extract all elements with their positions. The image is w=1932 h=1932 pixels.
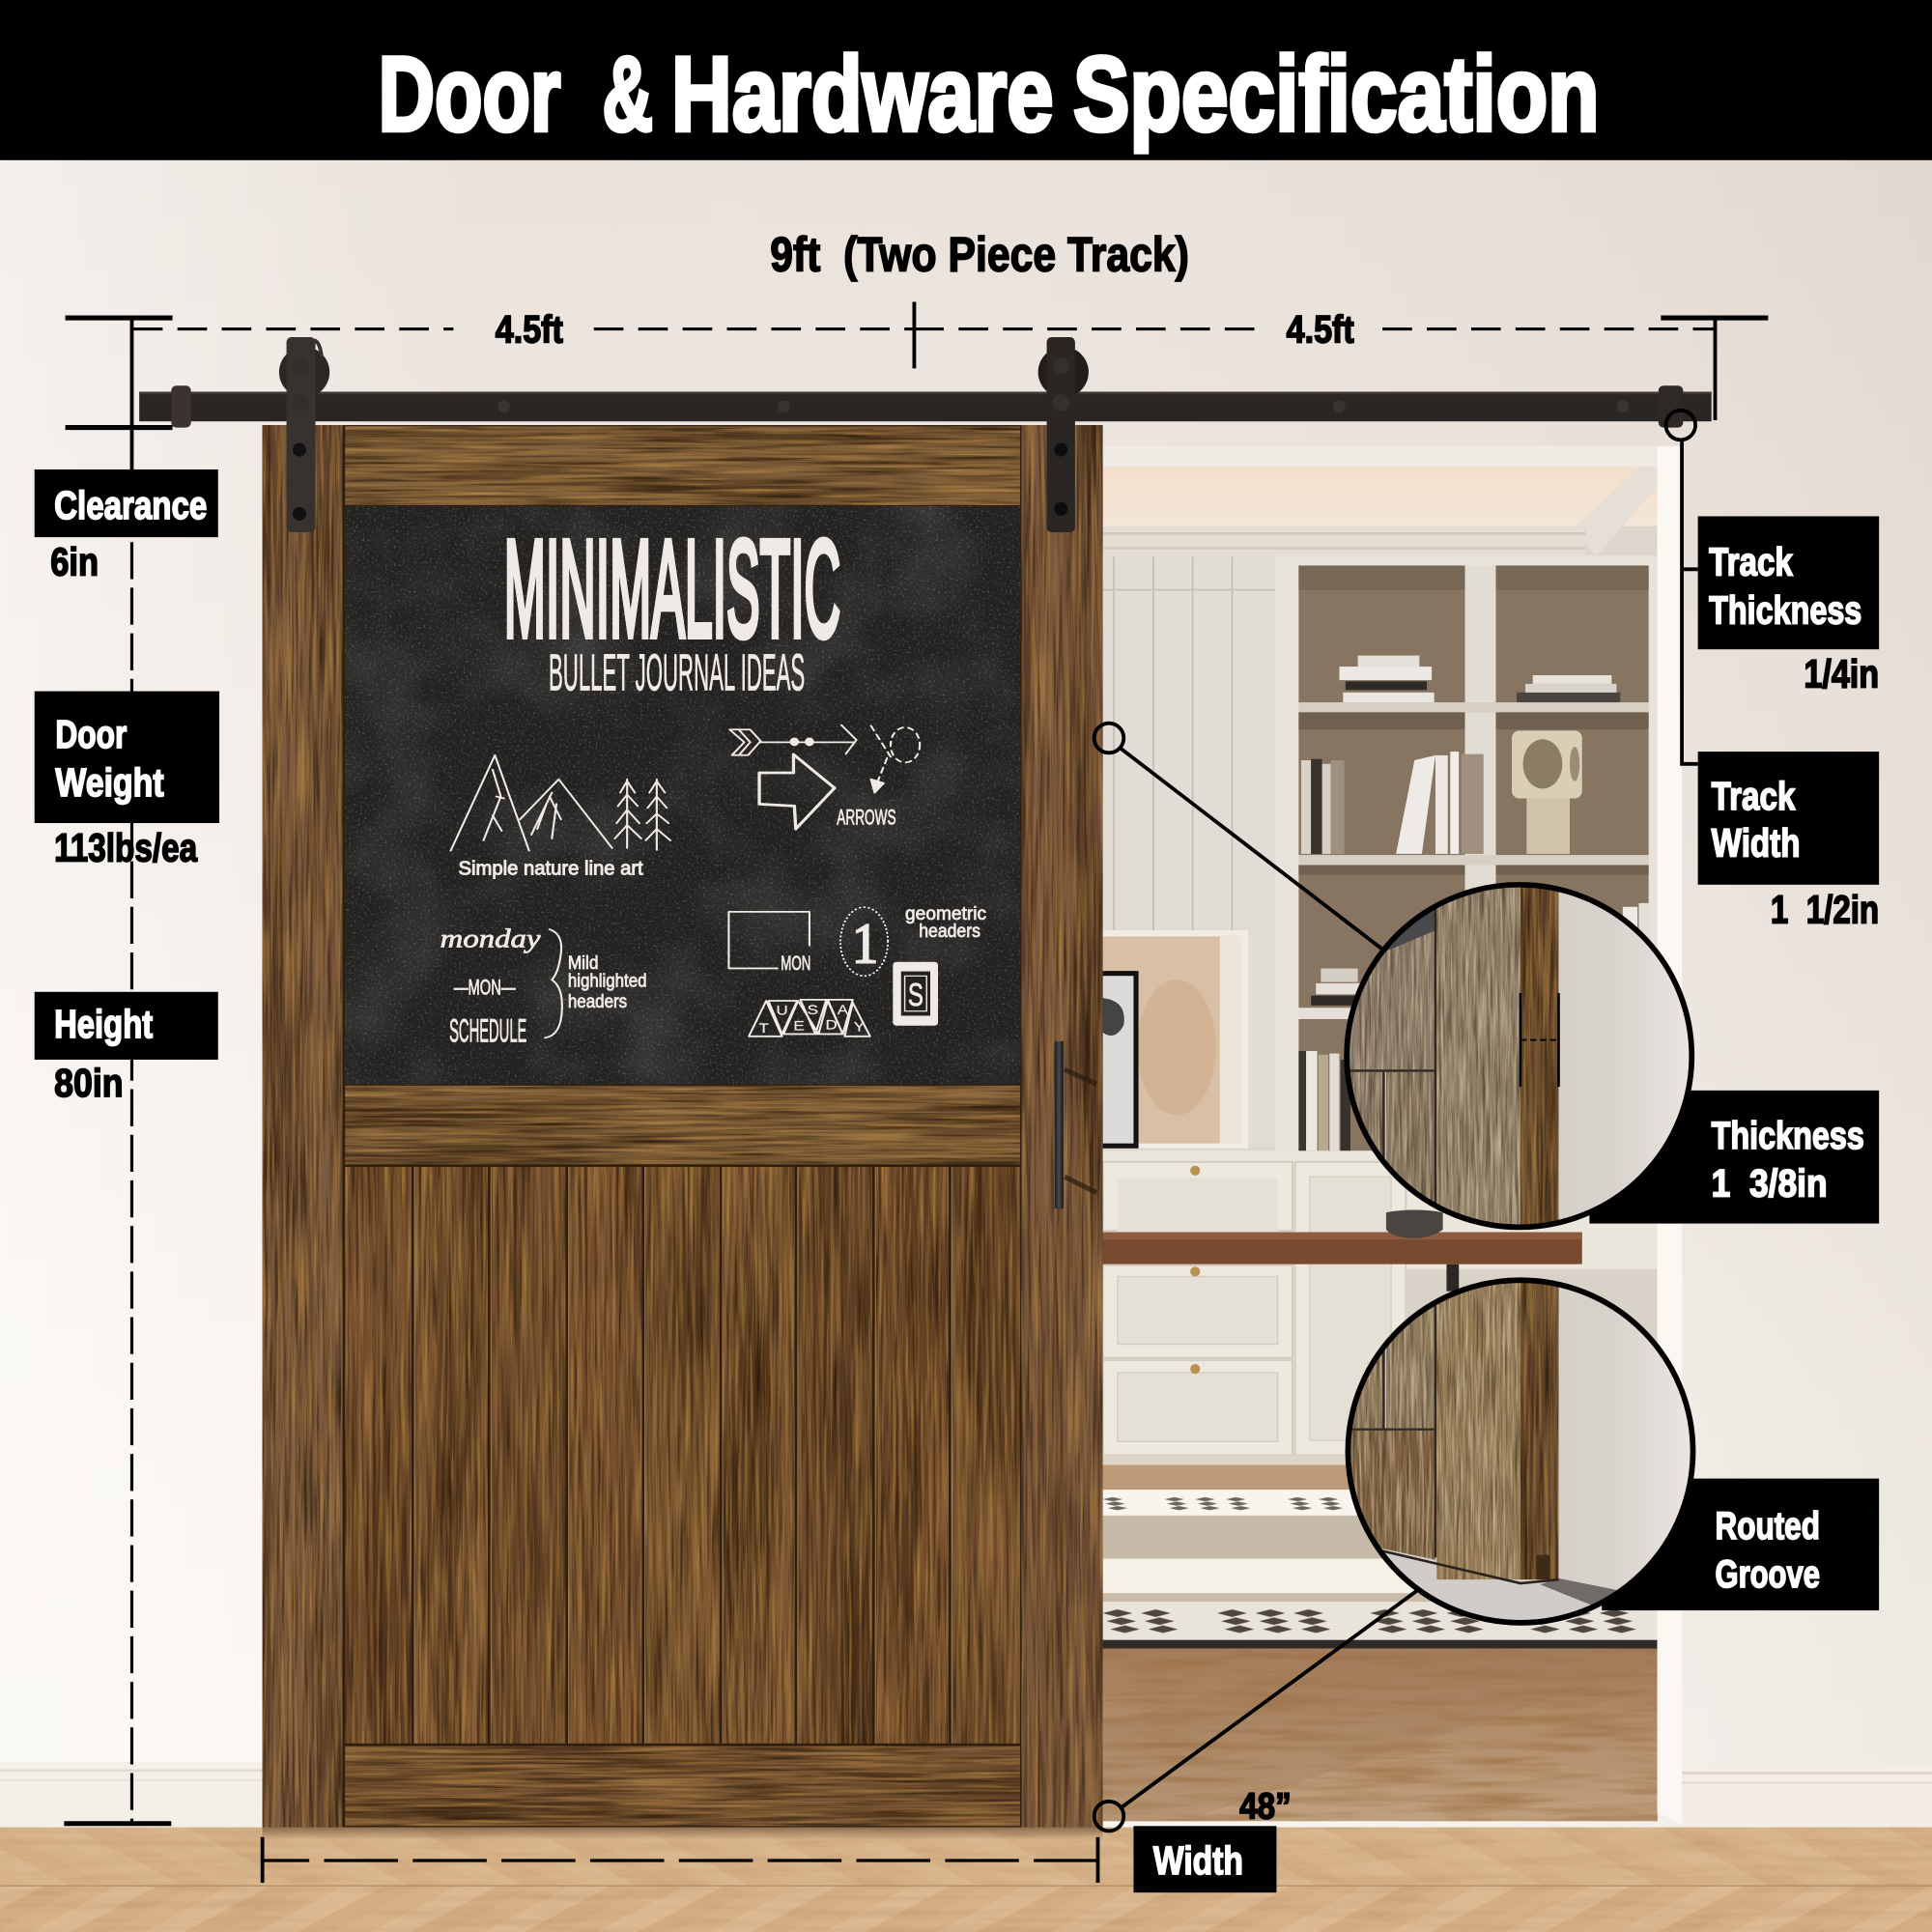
- ceiling soffit and cove light: [1103, 446, 1658, 557]
- width callout: [1133, 1786, 1292, 1892]
- routed groove callout: [1602, 1479, 1879, 1610]
- height dimension line: [64, 318, 171, 1824]
- title band: Door: [379, 36, 560, 154]
- clearance callout: 6in: [50, 540, 99, 584]
- geometric headers: S: [908, 977, 923, 1012]
- geometric headers: A: [838, 1003, 849, 1018]
- title band: Specification: [1050, 36, 1600, 154]
- track length dimension lines: [66, 301, 1768, 428]
- track thickness callout: Thickness: [1709, 587, 1861, 632]
- top rail: [345, 426, 1020, 505]
- geometric headers: E: [793, 1019, 805, 1034]
- zoom lens: routed groove: [1343, 1275, 1700, 1633]
- icon: feather arrow: [729, 725, 857, 755]
- chalkboard panel: [345, 506, 1020, 1084]
- title band: [0, 0, 1932, 160]
- framed artwork: [1103, 930, 1248, 1149]
- clearance callout: [35, 469, 218, 584]
- track length label: 9ft (Two Piece Track): [770, 228, 1189, 282]
- geometric headers: T: [759, 1021, 769, 1036]
- chalk headers: [440, 923, 646, 1049]
- half track label right: 4.5ft: [1287, 309, 1354, 352]
- track width callout: Width: [1712, 820, 1801, 865]
- books and sculpture: [1298, 656, 1651, 1151]
- track connector lines: [1665, 411, 1698, 764]
- opening jamb: [1658, 446, 1682, 1826]
- bookcase: [1275, 555, 1658, 1159]
- chalk drawing: [440, 512, 986, 1049]
- bottom rail: [345, 1746, 1020, 1826]
- track thickness callout: Track: [1709, 540, 1793, 584]
- track stop left: [171, 385, 191, 428]
- cabinets: [1103, 1151, 1658, 1466]
- icon: pine trees: [614, 780, 670, 850]
- leader lines: [1094, 724, 1417, 1831]
- chalk headers: headers: [568, 992, 627, 1012]
- half track label left: 4.5ft: [496, 309, 563, 352]
- geometric headers: U: [776, 1004, 788, 1018]
- chalk headers: Mild: [568, 953, 598, 974]
- door weight callout: [35, 692, 219, 870]
- desk with bowl: [1103, 1210, 1582, 1292]
- door handle: [1055, 1041, 1096, 1208]
- left roller hanger: [279, 337, 329, 532]
- height callout: 80in: [54, 1061, 124, 1105]
- left stile: [263, 425, 343, 1828]
- geometric headers: headers: [919, 920, 980, 942]
- chalk drawing: Simple nature line art: [459, 857, 643, 879]
- middle rail: [345, 1086, 1020, 1164]
- geometric headers: Y: [854, 1020, 866, 1035]
- geometric headers: geometric: [905, 902, 986, 924]
- barn door: [263, 425, 1103, 1828]
- track stop right: [1659, 385, 1683, 428]
- height callout: [35, 992, 218, 1105]
- track width callout: 1 1/2in: [1771, 887, 1879, 931]
- icon: dashed arrow: [871, 725, 920, 793]
- geometric headers: 1: [852, 913, 878, 976]
- chalk headers: SCHEDULE: [449, 1011, 526, 1049]
- geometric headers: D: [825, 1018, 838, 1033]
- interior floor and rug: [1103, 1465, 1658, 1821]
- right roller hanger: [1038, 337, 1089, 532]
- wall panelling: [1103, 555, 1275, 1148]
- track thickness callout: [1698, 516, 1879, 696]
- chalk headers: —MON—: [454, 976, 516, 1000]
- chalk drawing: ARROWS: [837, 806, 896, 830]
- vertical planks: [345, 1167, 1020, 1744]
- geometric headers: S: [808, 1003, 818, 1018]
- height callout: Height: [54, 1002, 153, 1046]
- title band: &: [582, 36, 653, 154]
- sliding track: [139, 385, 1712, 428]
- geometric headers: [728, 902, 986, 1037]
- floor: [0, 1828, 1932, 1932]
- door weight callout: Weight: [55, 760, 164, 805]
- width callout: 48”: [1239, 1786, 1292, 1828]
- icon: mountains: [451, 755, 612, 851]
- track thickness callout: 1/4in: [1804, 652, 1879, 696]
- title band: Hardware: [648, 36, 1054, 154]
- geometric headers: MON: [781, 952, 810, 975]
- door weight callout: Door: [55, 712, 127, 756]
- icon: block arrow: [759, 754, 835, 829]
- width callout: Width: [1153, 1838, 1243, 1883]
- chalk drawing: BULLET JOURNAL IDEAS: [549, 644, 805, 701]
- interior room seen through opening: [1103, 446, 1682, 1826]
- right stile: [1021, 425, 1103, 1828]
- routed groove callout: Routed: [1716, 1505, 1820, 1548]
- width dimension line: [263, 1837, 1097, 1883]
- track width callout: Track: [1712, 774, 1796, 818]
- thickness callout: Thickness: [1712, 1115, 1864, 1157]
- thickness callout: 1 3/8in: [1712, 1163, 1828, 1206]
- thickness callout: [1589, 1091, 1879, 1224]
- zoom lens: door thickness: [1343, 881, 1700, 1233]
- clearance callout: Clearance: [54, 483, 207, 527]
- chalk headers: monday: [440, 923, 541, 953]
- door weight callout: 113lbs/ea: [54, 826, 197, 870]
- track width callout: [1698, 752, 1879, 931]
- routed groove callout: Groove: [1716, 1553, 1820, 1596]
- chalk headers: highlighted: [568, 971, 646, 991]
- barn door: MINIMALISTIC: [504, 512, 840, 666]
